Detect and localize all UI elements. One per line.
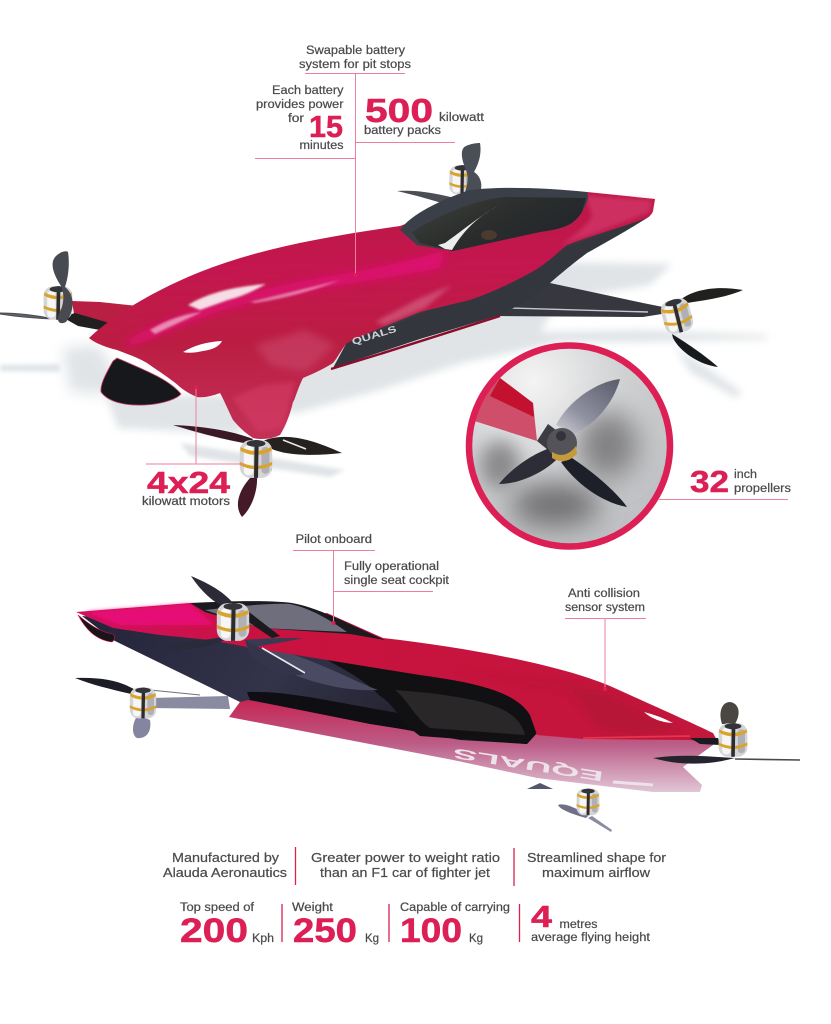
front rotor (173, 425, 342, 517)
belly (229, 695, 717, 792)
purple swoosh (240, 642, 378, 690)
feature: power ratio: Greater power to weight ratio (311, 850, 500, 865)
stat: top speed: Kph (252, 933, 274, 945)
tail sheen (560, 195, 652, 246)
stat: flying height: average flying height (531, 932, 651, 944)
callout: 500 kilowatt: battery packs (364, 125, 441, 137)
front rotors (160, 576, 307, 675)
callout: each battery 15 minutes: for (288, 113, 304, 125)
black streak (247, 692, 460, 738)
callout: 500 kilowatt (364, 92, 485, 137)
callout: pilot onboard: Pilot onboard (296, 534, 372, 546)
stat: flying height (531, 899, 651, 944)
feature: streamlined: maximum airflow (542, 865, 651, 880)
black recess (327, 660, 537, 744)
nose air intake (101, 358, 181, 405)
leader lines (293, 550, 433, 623)
left arm (72, 301, 138, 324)
stat: weight: 250 (293, 912, 357, 950)
callout: each battery 15 minutes (256, 85, 344, 152)
callout: each battery 15 minutes: 15 (309, 109, 343, 144)
right arm (470, 283, 668, 317)
callout: anti collision: sensor system (565, 602, 645, 614)
inset disc (469, 346, 670, 546)
fuselage (89, 192, 655, 439)
cockpit canopy (400, 188, 588, 251)
lower pale reflections (255, 330, 335, 372)
callout: pilot onboard: single seat cockpit (344, 575, 450, 587)
left arm underside (62, 313, 113, 330)
ground shadow (0, 262, 767, 477)
stat: top speed: Top speed of (180, 902, 255, 914)
inset content (462, 378, 638, 527)
leader dot (194, 385, 198, 389)
callout: swapable battery: Swapable battery (306, 45, 405, 57)
callout: 500 kilowatt: kilowatt (439, 112, 485, 124)
red top hull (76, 603, 718, 742)
callout: propellers: inch (734, 469, 757, 481)
callout: each battery 15 minutes: Each battery (272, 85, 344, 97)
divider (294, 847, 296, 885)
leader line (659, 498, 788, 500)
stat: flying height: metres (560, 919, 598, 931)
callout: each battery 15 minutes: minutes (300, 140, 344, 152)
callout: 500 kilowatt: 500 (365, 92, 433, 129)
inset ring (469, 346, 670, 546)
leader lines (255, 74, 455, 275)
callout: anti collision (565, 588, 646, 691)
red underside edge (331, 316, 500, 369)
hull front red lip (583, 736, 690, 738)
red hull reflection (450, 670, 680, 735)
stats row (180, 899, 651, 950)
callout: motors: kilowatt motors (142, 496, 230, 508)
leader dot (354, 273, 358, 277)
belly livery text: EQUALS (452, 745, 604, 785)
feature: manufacturer: Manufactured by (172, 850, 280, 865)
white reflection (644, 712, 673, 723)
lower rotor (527, 783, 612, 832)
right rotor (659, 288, 743, 367)
stat: weight (292, 902, 379, 950)
divider (281, 904, 283, 942)
leader lines (565, 618, 646, 689)
divider (388, 904, 390, 942)
rear rotor (397, 143, 481, 206)
white highlights (150, 280, 340, 353)
callout: motors (142, 385, 245, 508)
feature: manufacturer (163, 850, 288, 880)
callout: swapable battery (255, 45, 455, 277)
stat: flying height: 4 (531, 899, 553, 934)
feature row (163, 847, 667, 886)
leader lines (146, 387, 245, 464)
right arm highlight (476, 307, 648, 312)
callout: propellers: 32 (690, 464, 729, 499)
divider (518, 904, 520, 942)
feature: power ratio: than an F1 car of fighter jet (320, 865, 490, 880)
leader dot (332, 621, 336, 625)
stat: carrying capacity (400, 902, 510, 950)
callout: pilot onboard: Fully operational (344, 561, 439, 573)
callout: motors: 4x24 (147, 465, 231, 500)
callout: pilot onboard (293, 534, 450, 625)
feature: manufacturer: Alauda Aeronautics (163, 865, 288, 880)
callout: swapable battery: system for pit stops (299, 59, 411, 71)
callout: anti collision: Anti collision (568, 588, 640, 600)
magenta sheen (125, 250, 445, 345)
livery text: QUALS (351, 324, 398, 348)
dark underside (333, 216, 650, 368)
rear left rotor (75, 678, 230, 738)
fin reflection (232, 382, 295, 432)
inset: propeller detail (462, 346, 670, 546)
stat: top speed (180, 902, 274, 950)
feature: power ratio (311, 850, 500, 880)
callout: propellers (659, 464, 791, 500)
stat: carrying capacity: Kg (469, 933, 483, 945)
right front rotor (653, 702, 800, 764)
canopy (190, 601, 385, 640)
stat: top speed: 200 (180, 912, 248, 950)
callout: each battery 15 minutes: provides power (256, 99, 344, 111)
stat: weight: Weight (292, 902, 334, 914)
recess window (395, 690, 525, 735)
feature: streamlined (527, 850, 667, 880)
bottom aircraft (75, 576, 800, 832)
left rotor (0, 251, 73, 323)
mid pale reflection (375, 285, 452, 325)
dark underside (82, 616, 537, 744)
nose magenta sheen (85, 604, 215, 625)
leader dot (603, 687, 607, 691)
callout: propellers: propellers (734, 483, 791, 495)
feature: streamlined: Streamlined shape for (527, 850, 667, 865)
stat: carrying capacity: Capable of carrying (400, 902, 510, 914)
stat: weight: Kg (365, 933, 379, 945)
nose intake (78, 615, 114, 642)
divider (513, 848, 515, 886)
top aircraft (0, 143, 767, 517)
stat: carrying capacity: 100 (400, 912, 462, 950)
belly dash (613, 782, 653, 785)
